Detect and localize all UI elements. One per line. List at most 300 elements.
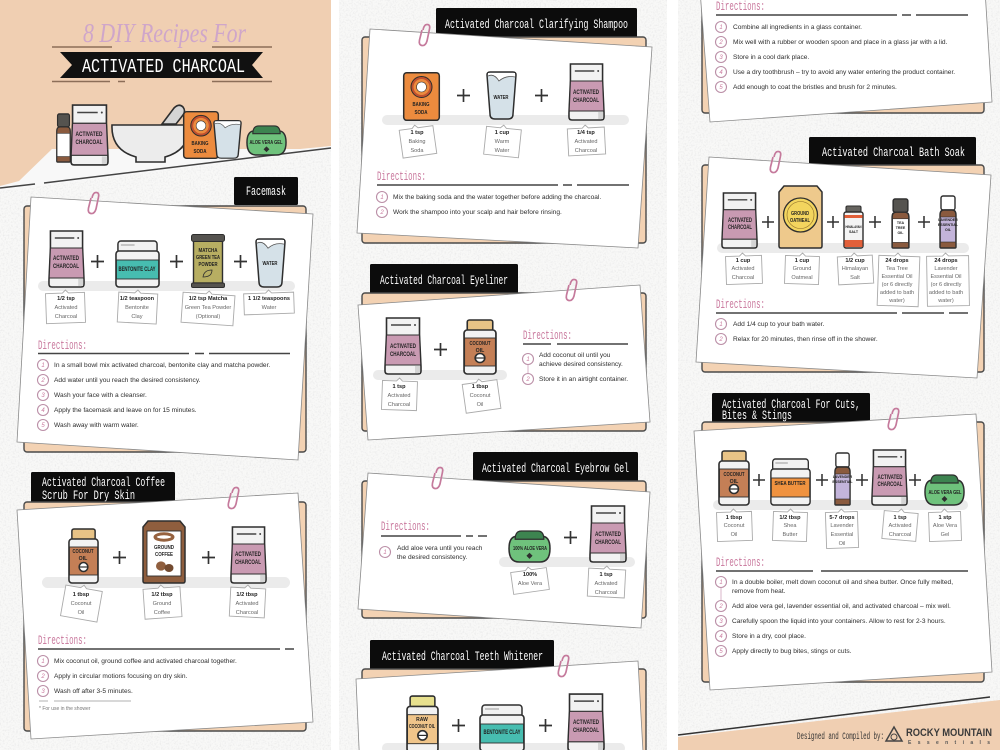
directions steps bbox=[716, 22, 955, 92]
ingredient: matcha: POWDER bbox=[198, 262, 218, 268]
directions step: 1 bbox=[383, 550, 387, 556]
tag: charcoal amount: Charcoal bbox=[595, 590, 617, 596]
directions steps: 2 bbox=[718, 40, 723, 46]
ingredient: raw coconut oil bbox=[407, 696, 438, 750]
panel: teeth whitener directions bbox=[700, 0, 992, 122]
plus bbox=[452, 719, 465, 732]
plus bbox=[753, 474, 765, 486]
ingredient: lavender oil: LAVENDER bbox=[833, 475, 853, 479]
plus bbox=[564, 531, 577, 544]
header beige banner bbox=[0, 0, 331, 186]
directions steps: 1 bbox=[719, 25, 723, 31]
beige backing sheet bbox=[702, 0, 984, 113]
tag: water amount bbox=[484, 123, 522, 158]
ingredient: aloe vera gel bbox=[925, 475, 964, 505]
icon: activated charcoal bbox=[71, 105, 108, 165]
tag: coconut amount: Oil bbox=[78, 610, 84, 616]
tag: lavender amount: (or 6 directly bbox=[931, 282, 962, 288]
tag: aloe amount: Gel bbox=[941, 532, 949, 538]
tag: soda amount: 1 tsp bbox=[410, 130, 424, 136]
ingredient: matcha: GREEN TEA bbox=[196, 255, 220, 261]
directions steps: 1 bbox=[526, 357, 530, 363]
ingredient: activated charcoal bbox=[590, 506, 626, 562]
directions steps: Store it in an airtight container. bbox=[539, 376, 628, 383]
white card bbox=[696, 157, 991, 378]
directions steps: 2 bbox=[718, 337, 723, 343]
ingredient: activated charcoal: ACTIVATED bbox=[595, 532, 622, 538]
paperclip bbox=[558, 656, 569, 677]
tag: shea amount: 1/2 tbsp bbox=[779, 515, 801, 521]
directions steps: 1 bbox=[719, 580, 723, 586]
plus bbox=[869, 216, 881, 228]
heading tag bbox=[31, 472, 175, 503]
tag: aloe amount: 100% bbox=[523, 572, 537, 578]
beige backing sheet bbox=[362, 669, 646, 750]
tag: charcoal amount: Activated bbox=[387, 393, 411, 399]
tag: matcha amount: 1/2 tsp Matcha bbox=[189, 296, 228, 302]
tag: charcoal amount: Activated bbox=[235, 601, 259, 607]
directions steps: 2 bbox=[40, 378, 45, 384]
directions heading: Directions: bbox=[716, 555, 765, 570]
ingredient: activated charcoal bbox=[568, 694, 604, 750]
tag: lavender amount: Lavender bbox=[830, 523, 854, 529]
icon: activated charcoal: ACTIVATED bbox=[76, 132, 103, 138]
white card bbox=[694, 414, 992, 690]
tag: water amount: Water bbox=[262, 305, 276, 311]
tag: clay amount: Clay bbox=[131, 314, 143, 320]
ingredient: activated charcoal: CHARCOAL bbox=[573, 728, 599, 734]
ingredient: activated charcoal: CHARCOAL bbox=[878, 482, 903, 488]
paperclip bbox=[888, 408, 899, 430]
title ribbon bbox=[52, 47, 272, 82]
ingredient: ground coffee: GROUND bbox=[154, 545, 174, 551]
directions steps: 2 bbox=[40, 674, 45, 680]
icon: mortar and pestle bbox=[112, 105, 189, 162]
panel: facemask bbox=[17, 177, 313, 460]
footer credit: Designed and Compiled by: bbox=[797, 731, 884, 743]
ingredient: coconut oil: COCONUT bbox=[72, 549, 94, 555]
ingredient: activated charcoal bbox=[231, 527, 266, 583]
paperclip bbox=[88, 192, 99, 214]
paperclip bbox=[419, 24, 430, 46]
ingredient: shea butter: SHEA BUTTER bbox=[774, 481, 806, 487]
directions steps: 1 bbox=[719, 322, 723, 328]
ingredient: activated charcoal bbox=[385, 318, 421, 374]
heading tag bbox=[234, 177, 298, 205]
ingredient: shea butter bbox=[771, 459, 810, 505]
plus bbox=[535, 89, 548, 102]
tag: tea tree amount bbox=[877, 252, 920, 307]
tag: aloe amount: Aloe Vera bbox=[933, 523, 958, 529]
beige backing sheet bbox=[702, 422, 984, 682]
ingredient: water: WATER bbox=[262, 261, 278, 267]
directions steps: In a double boiler, melt down coconut oil and shea butter. Once fully melted, bbox=[732, 579, 953, 586]
tag: charcoal amount: Activated bbox=[594, 581, 618, 587]
ingredient: activated charcoal: ACTIVATED bbox=[390, 344, 417, 350]
ingredient: activated charcoal bbox=[722, 193, 757, 248]
directions step bbox=[380, 545, 483, 561]
directions steps: 3 bbox=[41, 689, 45, 695]
plus bbox=[762, 216, 774, 228]
tag: water amount bbox=[244, 289, 294, 315]
tag: charcoal amount: Activated bbox=[888, 523, 912, 529]
ingredient: activated charcoal: ACTIVATED bbox=[878, 475, 903, 481]
heading tag: Activated Charcoal Eyebrow Gel bbox=[482, 462, 629, 476]
tag: clay amount bbox=[117, 289, 158, 324]
tag: charcoal amount: Charcoal bbox=[236, 610, 258, 616]
ingredient: bentonite clay bbox=[116, 241, 159, 287]
icon: aloe jar: ALOE VERA GEL bbox=[250, 140, 282, 146]
plus bbox=[457, 89, 470, 102]
tag: lavender amount: Oil bbox=[839, 541, 845, 547]
tag: clay amount: 1/2 teaspoon bbox=[120, 296, 155, 302]
paperclip bbox=[228, 488, 239, 509]
heading tag: Bites & Stings bbox=[722, 409, 792, 423]
ingredient: activated charcoal bbox=[49, 231, 84, 287]
tag: water amount: Water bbox=[495, 148, 509, 154]
directions heading: Directions: bbox=[381, 519, 430, 534]
ingredient: matcha bbox=[192, 234, 224, 288]
plus bbox=[170, 255, 183, 268]
tag: water amount: 1 cup bbox=[495, 130, 510, 136]
tag: oatmeal amount: 1 cup bbox=[795, 258, 810, 264]
ingredient: ground oatmeal: GROUND bbox=[791, 211, 809, 217]
ingredient: himalayan salt bbox=[844, 206, 863, 248]
tag: lavender amount: water) bbox=[937, 298, 954, 304]
tag: tea tree amount: water) bbox=[888, 298, 905, 304]
tag: clay amount: Bentonite bbox=[125, 305, 149, 311]
tag: water amount: 1 1/2 teaspoons bbox=[248, 296, 290, 302]
white card bbox=[356, 661, 644, 750]
directions step: Add aloe vera until you reach bbox=[397, 545, 483, 552]
paperclip bbox=[770, 152, 781, 173]
title ribbon: ACTIVATED CHARCOAL bbox=[82, 56, 245, 78]
tag: salt amount: Salt bbox=[850, 275, 860, 281]
ingredient: coconut oil: COCONUT bbox=[724, 472, 745, 478]
panel: eyeliner bbox=[358, 264, 650, 440]
tag: tea tree amount: added to bath bbox=[880, 290, 914, 296]
heading tag: Scrub For Dry Skin bbox=[42, 489, 135, 503]
directions steps: Add water until you reach the desired consistency. bbox=[54, 377, 201, 384]
ingredient: lavender oil: OIL bbox=[945, 228, 952, 232]
tag: charcoal amount: Charcoal bbox=[55, 314, 77, 320]
directions steps: Add 1/4 cup to your bath water. bbox=[733, 321, 824, 328]
plus bbox=[91, 255, 104, 268]
ingredient: bentonite clay: BENTONITE CLAY bbox=[484, 730, 520, 736]
panel: bath soak bbox=[696, 137, 991, 378]
directions steps: In a small bowl mix activated charcoal, bentonite clay and matcha powder. bbox=[54, 362, 270, 369]
ingredient: activated charcoal: CHARCOAL bbox=[390, 352, 416, 358]
plus bbox=[234, 255, 247, 268]
tag: coconut amount: Oil bbox=[477, 402, 483, 408]
icon: activated charcoal: CHARCOAL bbox=[76, 140, 103, 146]
tag: coconut amount: Coconut bbox=[724, 523, 745, 529]
tag: aloe amount bbox=[510, 565, 549, 594]
directions steps: Add enough to coat the bristles and brush for 2 minutes. bbox=[733, 84, 897, 91]
shelf band bbox=[713, 500, 968, 510]
tag: lavender amount: Lavender bbox=[934, 266, 958, 272]
plus bbox=[113, 551, 126, 564]
ingredient: coconut oil: OIL bbox=[79, 556, 88, 562]
white card bbox=[17, 493, 313, 739]
tag: water amount: Warm bbox=[495, 139, 510, 145]
ingredient: matcha: MATCHA bbox=[198, 248, 218, 254]
ingredient: activated charcoal: ACTIVATED bbox=[573, 90, 600, 96]
tag: coffee amount: Ground bbox=[153, 601, 171, 607]
plus bbox=[539, 719, 552, 732]
ingredient: lavender oil: ESSENTIAL bbox=[832, 480, 853, 484]
tag: oatmeal amount: Oatmeal bbox=[791, 275, 813, 281]
directions steps: 5 bbox=[719, 85, 723, 91]
tag: coffee amount: 1/2 tbsp bbox=[151, 592, 173, 598]
heading tag: Facemask bbox=[246, 185, 286, 199]
tag: charcoal amount: 1/2 tbsp bbox=[236, 592, 258, 598]
tag: coconut amount: Coconut bbox=[470, 393, 491, 399]
tag: lavender amount: Essential Oil bbox=[930, 274, 962, 280]
directions steps bbox=[522, 352, 628, 384]
ingredient: tea tree oil: TREE bbox=[896, 226, 906, 230]
ingredient: coconut oil: COCONUT bbox=[470, 341, 491, 347]
ingredient: activated charcoal: CHARCOAL bbox=[573, 98, 599, 104]
directions steps: Wash your face with a cleanser. bbox=[54, 392, 147, 399]
beige backing sheet bbox=[24, 206, 306, 452]
hero illustration: products on shelf bbox=[57, 105, 286, 165]
tag: lavender amount: 24 drops bbox=[934, 258, 958, 264]
tag: charcoal amount: Charcoal bbox=[388, 402, 410, 408]
beige backing sheet bbox=[362, 37, 646, 243]
shelf edge line bbox=[0, 148, 331, 188]
tag: charcoal amount: 1 tsp bbox=[893, 515, 907, 521]
ingredient: raw coconut oil: RAW bbox=[416, 717, 428, 723]
tag: coffee amount bbox=[143, 584, 182, 619]
icon: oil bottle bbox=[57, 114, 70, 162]
directions steps: achieve desired consistency. bbox=[539, 361, 623, 368]
directions step: the desired consistency. bbox=[397, 554, 467, 561]
tag: shea amount: Shea bbox=[783, 523, 797, 529]
directions steps: 2 bbox=[525, 377, 530, 383]
tag: coconut amount bbox=[716, 508, 753, 542]
tag: tea tree amount: 24 drops bbox=[885, 258, 909, 264]
tag: salt amount bbox=[837, 252, 874, 285]
directions steps: Mix coconut oil, ground coffee and activated charcoal together. bbox=[54, 658, 237, 665]
ingredient: activated charcoal: ACTIVATED bbox=[235, 552, 262, 558]
ingredient: tea tree oil bbox=[892, 199, 909, 248]
ingredient: activated charcoal: ACTIVATED bbox=[573, 720, 600, 726]
ingredient: tea tree oil: TEA bbox=[897, 221, 904, 225]
ingredient: lavender oil bbox=[938, 196, 959, 248]
tag: aloe amount: Aloe Vera bbox=[518, 581, 543, 587]
tag: charcoal amount: 1 tsp bbox=[392, 384, 406, 390]
tag: coffee amount: Coffee bbox=[154, 610, 170, 616]
ingredient: bentonite clay bbox=[480, 705, 524, 750]
directions steps: Wash off after 3-5 minutes. bbox=[54, 688, 133, 695]
ingredient: coconut oil: OIL bbox=[476, 348, 485, 354]
shelf band bbox=[373, 370, 507, 380]
heading tag bbox=[370, 640, 554, 670]
ingredient: ground coffee: COFFEE bbox=[155, 552, 173, 558]
beige backing sheet bbox=[24, 502, 306, 731]
plus bbox=[434, 343, 447, 356]
ingredient: himalayan salt: HIMALAYAN bbox=[846, 225, 862, 229]
tag: charcoal amount: Charcoal bbox=[732, 275, 754, 281]
directions steps: 1 bbox=[41, 363, 45, 369]
shelf band bbox=[382, 743, 625, 750]
directions steps: Apply directly to bug bites, stings or cuts. bbox=[732, 648, 852, 655]
ingredient: activated charcoal: CHARCOAL bbox=[53, 264, 79, 270]
white card bbox=[358, 473, 650, 628]
heading tag: Activated Charcoal Clarifying Shampoo bbox=[445, 18, 628, 32]
tag: lavender amount: added to bath bbox=[929, 290, 963, 296]
ingredient: lavender oil: ESSENTIAL bbox=[938, 223, 959, 227]
directions steps: Add coconut oil until you bbox=[539, 352, 611, 359]
tag: aloe amount: 1 stp bbox=[938, 515, 952, 521]
shelf band bbox=[38, 281, 295, 291]
tag: soda amount: Soda bbox=[410, 148, 424, 154]
directions steps: 3 bbox=[719, 619, 723, 625]
directions steps: Store in a dry, cool place. bbox=[732, 633, 806, 640]
directions steps: 2 bbox=[718, 604, 723, 610]
tag: salt amount: Himalayan bbox=[842, 266, 868, 272]
plus bbox=[202, 551, 215, 564]
tag: coconut amount: Oil bbox=[731, 532, 737, 538]
panel: teeth whitener bbox=[356, 640, 646, 750]
tag: charcoal amount: Charcoal bbox=[889, 532, 911, 538]
directions steps bbox=[38, 360, 270, 430]
tag: charcoal amount: 1 cup bbox=[736, 258, 751, 264]
directions steps: 5 bbox=[41, 423, 45, 429]
directions steps: 1 bbox=[41, 659, 45, 665]
directions steps bbox=[716, 576, 953, 656]
tag: coconut amount: 1 tbsp bbox=[726, 515, 743, 521]
tag: matcha amount bbox=[181, 289, 235, 326]
tag: charcoal amount: Activated bbox=[54, 305, 78, 311]
directions steps: Apply the facemask and leave on for 15 minutes. bbox=[54, 407, 197, 414]
directions steps: 5 bbox=[719, 649, 723, 655]
ingredient: activated charcoal: CHARCOAL bbox=[595, 540, 621, 546]
icon: baking soda bbox=[184, 112, 218, 158]
white card bbox=[358, 285, 650, 440]
directions steps: 3 bbox=[719, 55, 723, 61]
ingredient: ground oatmeal bbox=[779, 186, 822, 248]
tag: coconut amount bbox=[462, 377, 501, 413]
tag: lavender amount: 5-7 drops bbox=[829, 515, 855, 521]
tag: matcha amount: (Optional) bbox=[196, 314, 220, 320]
tag: coconut amount: 1 tbsp bbox=[472, 384, 489, 390]
tag: charcoal amount: 1/2 tsp bbox=[57, 296, 75, 302]
plus bbox=[816, 474, 828, 486]
ingredient: activated charcoal bbox=[569, 64, 604, 120]
directions steps: Relax for 20 minutes, then rinse off in the shower. bbox=[733, 336, 878, 343]
tag: shea amount bbox=[772, 508, 808, 542]
ingredient: lavender oil bbox=[832, 453, 853, 505]
directions steps: 4 bbox=[41, 408, 45, 414]
panel: coffee scrub bbox=[17, 472, 313, 739]
tag: aloe amount bbox=[928, 508, 962, 542]
directions steps: 4 bbox=[719, 70, 723, 76]
heading tag bbox=[712, 393, 870, 424]
ingredient: activated charcoal: CHARCOAL bbox=[728, 225, 752, 231]
ingredient: ground coffee bbox=[143, 521, 185, 583]
ingredient: bentonite clay: BENTONITE CLAY bbox=[118, 267, 156, 273]
tag: lavender amount: Essential bbox=[831, 532, 853, 538]
ingredient: ground oatmeal: OATMEAL bbox=[790, 218, 810, 224]
icon: baking soda: SODA bbox=[194, 149, 207, 155]
tag: coconut amount: 1 tbsp bbox=[73, 592, 90, 598]
footer band bbox=[678, 697, 1000, 750]
shelf band bbox=[42, 577, 290, 588]
tag: salt amount: 1/2 cup bbox=[845, 258, 865, 264]
directions steps: Store in a cool dark place. bbox=[733, 54, 809, 61]
footer logo: Essentials bbox=[908, 740, 990, 746]
heading tag bbox=[436, 8, 637, 38]
white card bbox=[17, 197, 313, 460]
panel: shampoo bbox=[357, 8, 652, 248]
directions steps: Wash away with warm water. bbox=[54, 422, 139, 429]
tag: tea tree amount: (or 6 directly bbox=[882, 282, 913, 288]
tag: shea amount: Butter bbox=[783, 532, 798, 538]
white card bbox=[357, 29, 652, 248]
tag: charcoal amount: Activated bbox=[731, 266, 755, 272]
directions steps: Work the shampoo into your scalp and hair before rinsing. bbox=[393, 209, 562, 216]
tag: charcoal amount bbox=[45, 289, 86, 324]
ingredient: baking soda: BAKING bbox=[412, 102, 430, 108]
ingredient: baking soda bbox=[404, 73, 439, 120]
tag: lavender amount bbox=[825, 508, 859, 549]
directions steps: Add aloe vera gel, lavender essential oil, and activated charcoal – mix well. bbox=[732, 603, 951, 610]
ingredient: activated charcoal: ACTIVATED bbox=[53, 256, 80, 262]
footnote bbox=[39, 701, 131, 712]
ingredient: water: WATER bbox=[494, 95, 509, 101]
plus bbox=[827, 216, 839, 228]
ingredient: aloe vera bbox=[509, 531, 550, 562]
tag: charcoal amount bbox=[587, 565, 626, 598]
ingredient: coconut oil bbox=[69, 529, 98, 583]
beige backing sheet bbox=[362, 293, 646, 431]
ingredient: water bbox=[487, 72, 516, 119]
plus bbox=[918, 216, 930, 228]
tag: coconut amount bbox=[60, 582, 103, 622]
ingredient: coconut oil bbox=[719, 451, 749, 505]
heading tag bbox=[473, 452, 638, 482]
tag: charcoal amount bbox=[882, 508, 918, 541]
tag: coconut amount: Coconut bbox=[71, 601, 92, 607]
tag: tea tree amount: Essential Oil bbox=[881, 274, 913, 280]
tag: oatmeal amount bbox=[785, 252, 820, 285]
tag: charcoal amount bbox=[229, 584, 266, 618]
ingredient: baking soda: SODA bbox=[414, 110, 428, 116]
tag: tea tree amount: Tea Tree bbox=[886, 266, 908, 272]
directions heading: Directions: bbox=[38, 338, 87, 353]
directions steps: Mix well with a rubber or wooden spoon and place in a glass jar with a lid. bbox=[733, 39, 948, 46]
directions steps: Mix the baking soda and the water together before adding the charcoal. bbox=[393, 194, 601, 201]
ingredient: tea tree oil: OIL bbox=[898, 231, 904, 235]
ingredient: activated charcoal bbox=[872, 450, 907, 505]
paperclip bbox=[566, 280, 577, 301]
beige backing sheet bbox=[702, 165, 984, 372]
tag: charcoal amount bbox=[381, 377, 418, 411]
tag: soda amount bbox=[399, 123, 437, 158]
directions steps: 4 bbox=[719, 634, 723, 640]
ingredient: water bbox=[256, 239, 285, 287]
shelf band bbox=[499, 557, 635, 567]
tag: lavender amount bbox=[927, 253, 969, 306]
ingredient: coconut oil: OIL bbox=[730, 479, 739, 485]
directions steps: remove from heat. bbox=[732, 588, 786, 595]
shelf band bbox=[382, 115, 629, 125]
directions heading: Directions: bbox=[377, 169, 426, 184]
ingredient: activated charcoal: CHARCOAL bbox=[235, 560, 261, 566]
tag: charcoal amount: 1 tsp bbox=[599, 572, 613, 578]
